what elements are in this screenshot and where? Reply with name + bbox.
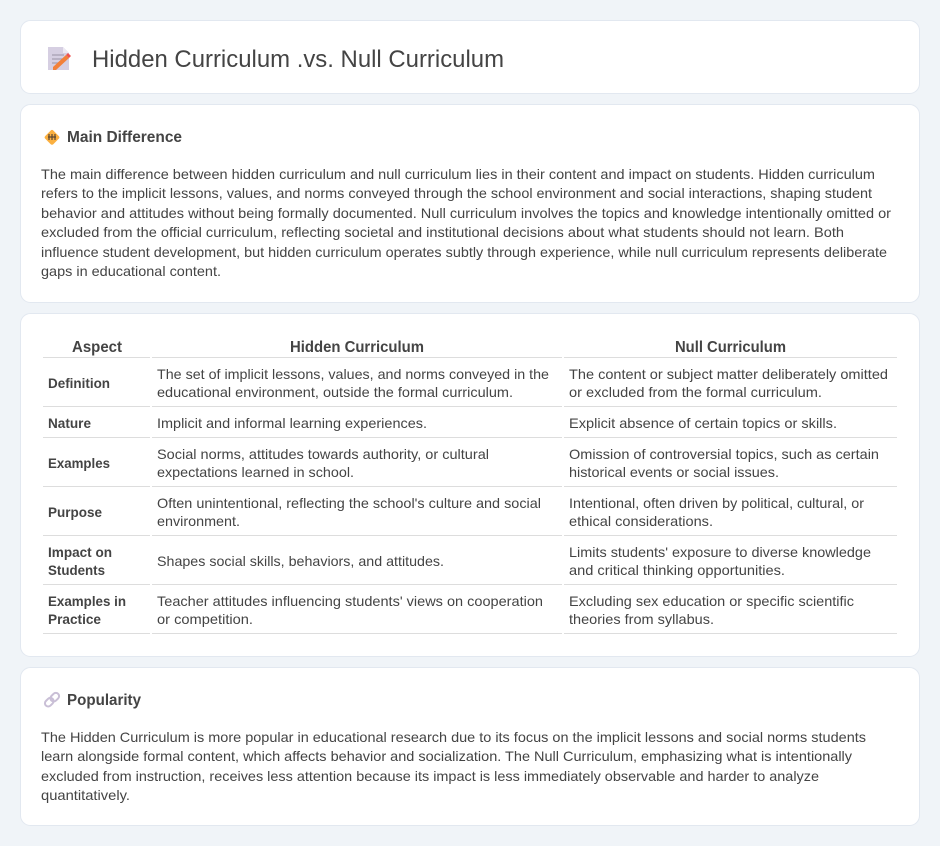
table row: purpose: ethical considerations. <box>569 513 713 529</box>
table header row: Null Curriculum <box>675 339 786 356</box>
icon: document with pencil <box>48 47 71 70</box>
text block: main difference paragraph: influence student development, but hidden curriculum operates subtly through experience, while null curriculum represents deliberate <box>41 244 887 260</box>
panel: comparison table <box>20 314 920 656</box>
table row: purpose: environment. <box>157 513 240 529</box>
table row: purpose: Purpose <box>48 504 102 520</box>
text block: popularity paragraph: quantitatively. <box>41 787 130 803</box>
text block: main difference paragraph <box>41 166 891 279</box>
icon: diamond warning sign <box>44 129 60 145</box>
table row: examples in practice: theories from syllabus. <box>569 611 714 627</box>
text block: main difference paragraph: The main difference between hidden curriculum and null curriculum lies in their content and impact on students. Hidden curriculum <box>41 166 875 182</box>
heading: main difference: Main Difference <box>67 129 182 146</box>
panel: title header <box>20 20 920 94</box>
table row: examples <box>48 446 879 480</box>
table row: examples in practice: or competition. <box>157 611 253 627</box>
text block: main difference paragraph: refers to the implicit lessons, values, and norms conveyed through the school environment and social interactions, shaping student <box>41 185 872 201</box>
text block: popularity paragraph <box>41 729 866 803</box>
table row: nature: Nature <box>48 415 91 431</box>
table row: definition: The content or subject matter deliberately omitted <box>569 366 888 382</box>
table row: examples in practice: Excluding sex education or specific scientific <box>569 593 854 609</box>
table row: examples: historical events or social issues. <box>569 464 779 480</box>
text block: main difference paragraph: excluded from the official curriculum, reflecting societal and institutional decisions about what students should not learn. Both <box>41 224 844 240</box>
table row: definition: educational environment, outside the formal curriculum. <box>157 384 513 400</box>
table row: definition: or excluded from the formal curriculum. <box>569 384 822 400</box>
table row: nature: Implicit and informal learning experiences. <box>157 415 427 431</box>
table row: impact on students: Limits students' exposure to diverse knowledge <box>569 544 871 560</box>
table row: examples: Social norms, attitudes towards authority, or cultural <box>157 446 489 462</box>
table row: examples: Omission of controversial topics, such as certain <box>569 446 879 462</box>
table row: impact on students: Shapes social skills, behaviors, and attitudes. <box>157 553 444 569</box>
table row: definition: The set of implicit lessons, values, and norms conveyed in the <box>157 366 549 382</box>
table row: nature: Explicit absence of certain topics or skills. <box>569 415 837 431</box>
text block: popularity paragraph: learn alongside formal content, which affects behavior and socialization. The Null Curriculum, emphasizing what is intentionally <box>41 748 852 764</box>
table row: examples in practice: Examples in <box>48 593 126 609</box>
table row: impact on students: and critical thinking opportunities. <box>569 562 785 578</box>
table header row <box>72 339 786 356</box>
table row: impact on students: Impact on <box>48 544 112 560</box>
text block: popularity paragraph: excluded from instruction, receives less attention because its impact is less immediately observable and harder to analyze <box>41 768 819 784</box>
table row: examples in practice <box>48 593 854 627</box>
table row: examples in practice: Teacher attitudes influencing students' views on cooperation <box>157 593 543 609</box>
text block: main difference paragraph: behavior and attitudes without being formally documented. Null curriculum involves the topics and knowledge intentionally omitted or <box>41 205 891 221</box>
panel: main difference <box>20 104 920 302</box>
table row: impact on students <box>48 544 871 578</box>
text block: main difference paragraph: gaps in educational content. <box>41 263 221 279</box>
table row: impact on students: Students <box>48 562 105 578</box>
title: Hidden Curriculum .vs. Null Curriculum <box>92 46 504 73</box>
table row: examples: expectations learned in school. <box>157 464 354 480</box>
table row: examples: Examples <box>48 455 110 471</box>
table row: definition: Definition <box>48 375 110 391</box>
table row: purpose: Often unintentional, reflecting the school's culture and social <box>157 495 541 511</box>
table row: definition <box>48 366 888 400</box>
text block: popularity paragraph: The Hidden Curriculum is more popular in educational research due to its focus on the implicit lessons and social norms students <box>41 729 866 745</box>
icon: chain link <box>44 692 60 708</box>
table row: examples in practice: Practice <box>48 611 101 627</box>
panel: popularity <box>20 668 920 826</box>
table row: purpose <box>48 495 864 529</box>
table header row: Hidden Curriculum <box>290 339 424 356</box>
heading: popularity: Popularity <box>67 692 141 709</box>
table row: nature <box>48 415 837 431</box>
table header row: Aspect <box>72 339 123 356</box>
table row: purpose: Intentional, often driven by political, cultural, or <box>569 495 864 511</box>
